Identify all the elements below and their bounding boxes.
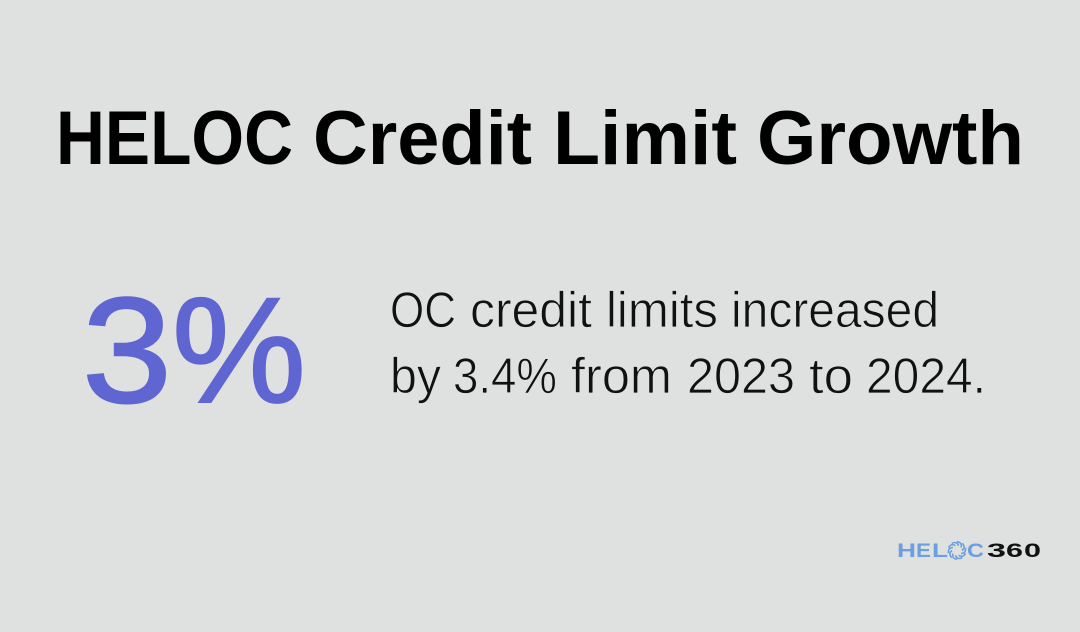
description text: by xyxy=(390,348,441,404)
title: Limit xyxy=(553,96,737,181)
logo: HELOC360: C xyxy=(967,541,984,562)
description text: limits xyxy=(606,282,718,338)
logo: HELOC360: E xyxy=(916,541,931,562)
description text: from xyxy=(571,348,672,404)
big statistic: 3% xyxy=(82,266,306,434)
description text: 2024. xyxy=(866,348,986,404)
description text: to xyxy=(809,348,853,404)
title: HELOC xyxy=(56,96,293,181)
description text: OC xyxy=(390,282,456,338)
big statistic: 3%: % xyxy=(172,266,306,434)
icon: swirl O xyxy=(947,541,967,560)
description text: 3.4% xyxy=(453,348,557,404)
title: Growth xyxy=(757,96,1024,181)
logo: HELOC360: 6 xyxy=(1006,541,1023,562)
description text: 2023 xyxy=(687,348,795,404)
description text xyxy=(390,282,986,404)
logo: HELOC360: H xyxy=(897,541,916,562)
description text: increased xyxy=(731,282,939,338)
logo: HELOC360: L xyxy=(932,541,949,562)
title xyxy=(56,96,1024,181)
logo: HELOC360: 3 xyxy=(987,541,1006,562)
logo: HELOC360: 0 xyxy=(1024,541,1041,562)
description text: credit xyxy=(470,282,592,338)
logo: HELOC360 xyxy=(897,541,1041,562)
big statistic: 3%: 3 xyxy=(82,266,172,434)
title: Credit xyxy=(313,96,532,181)
